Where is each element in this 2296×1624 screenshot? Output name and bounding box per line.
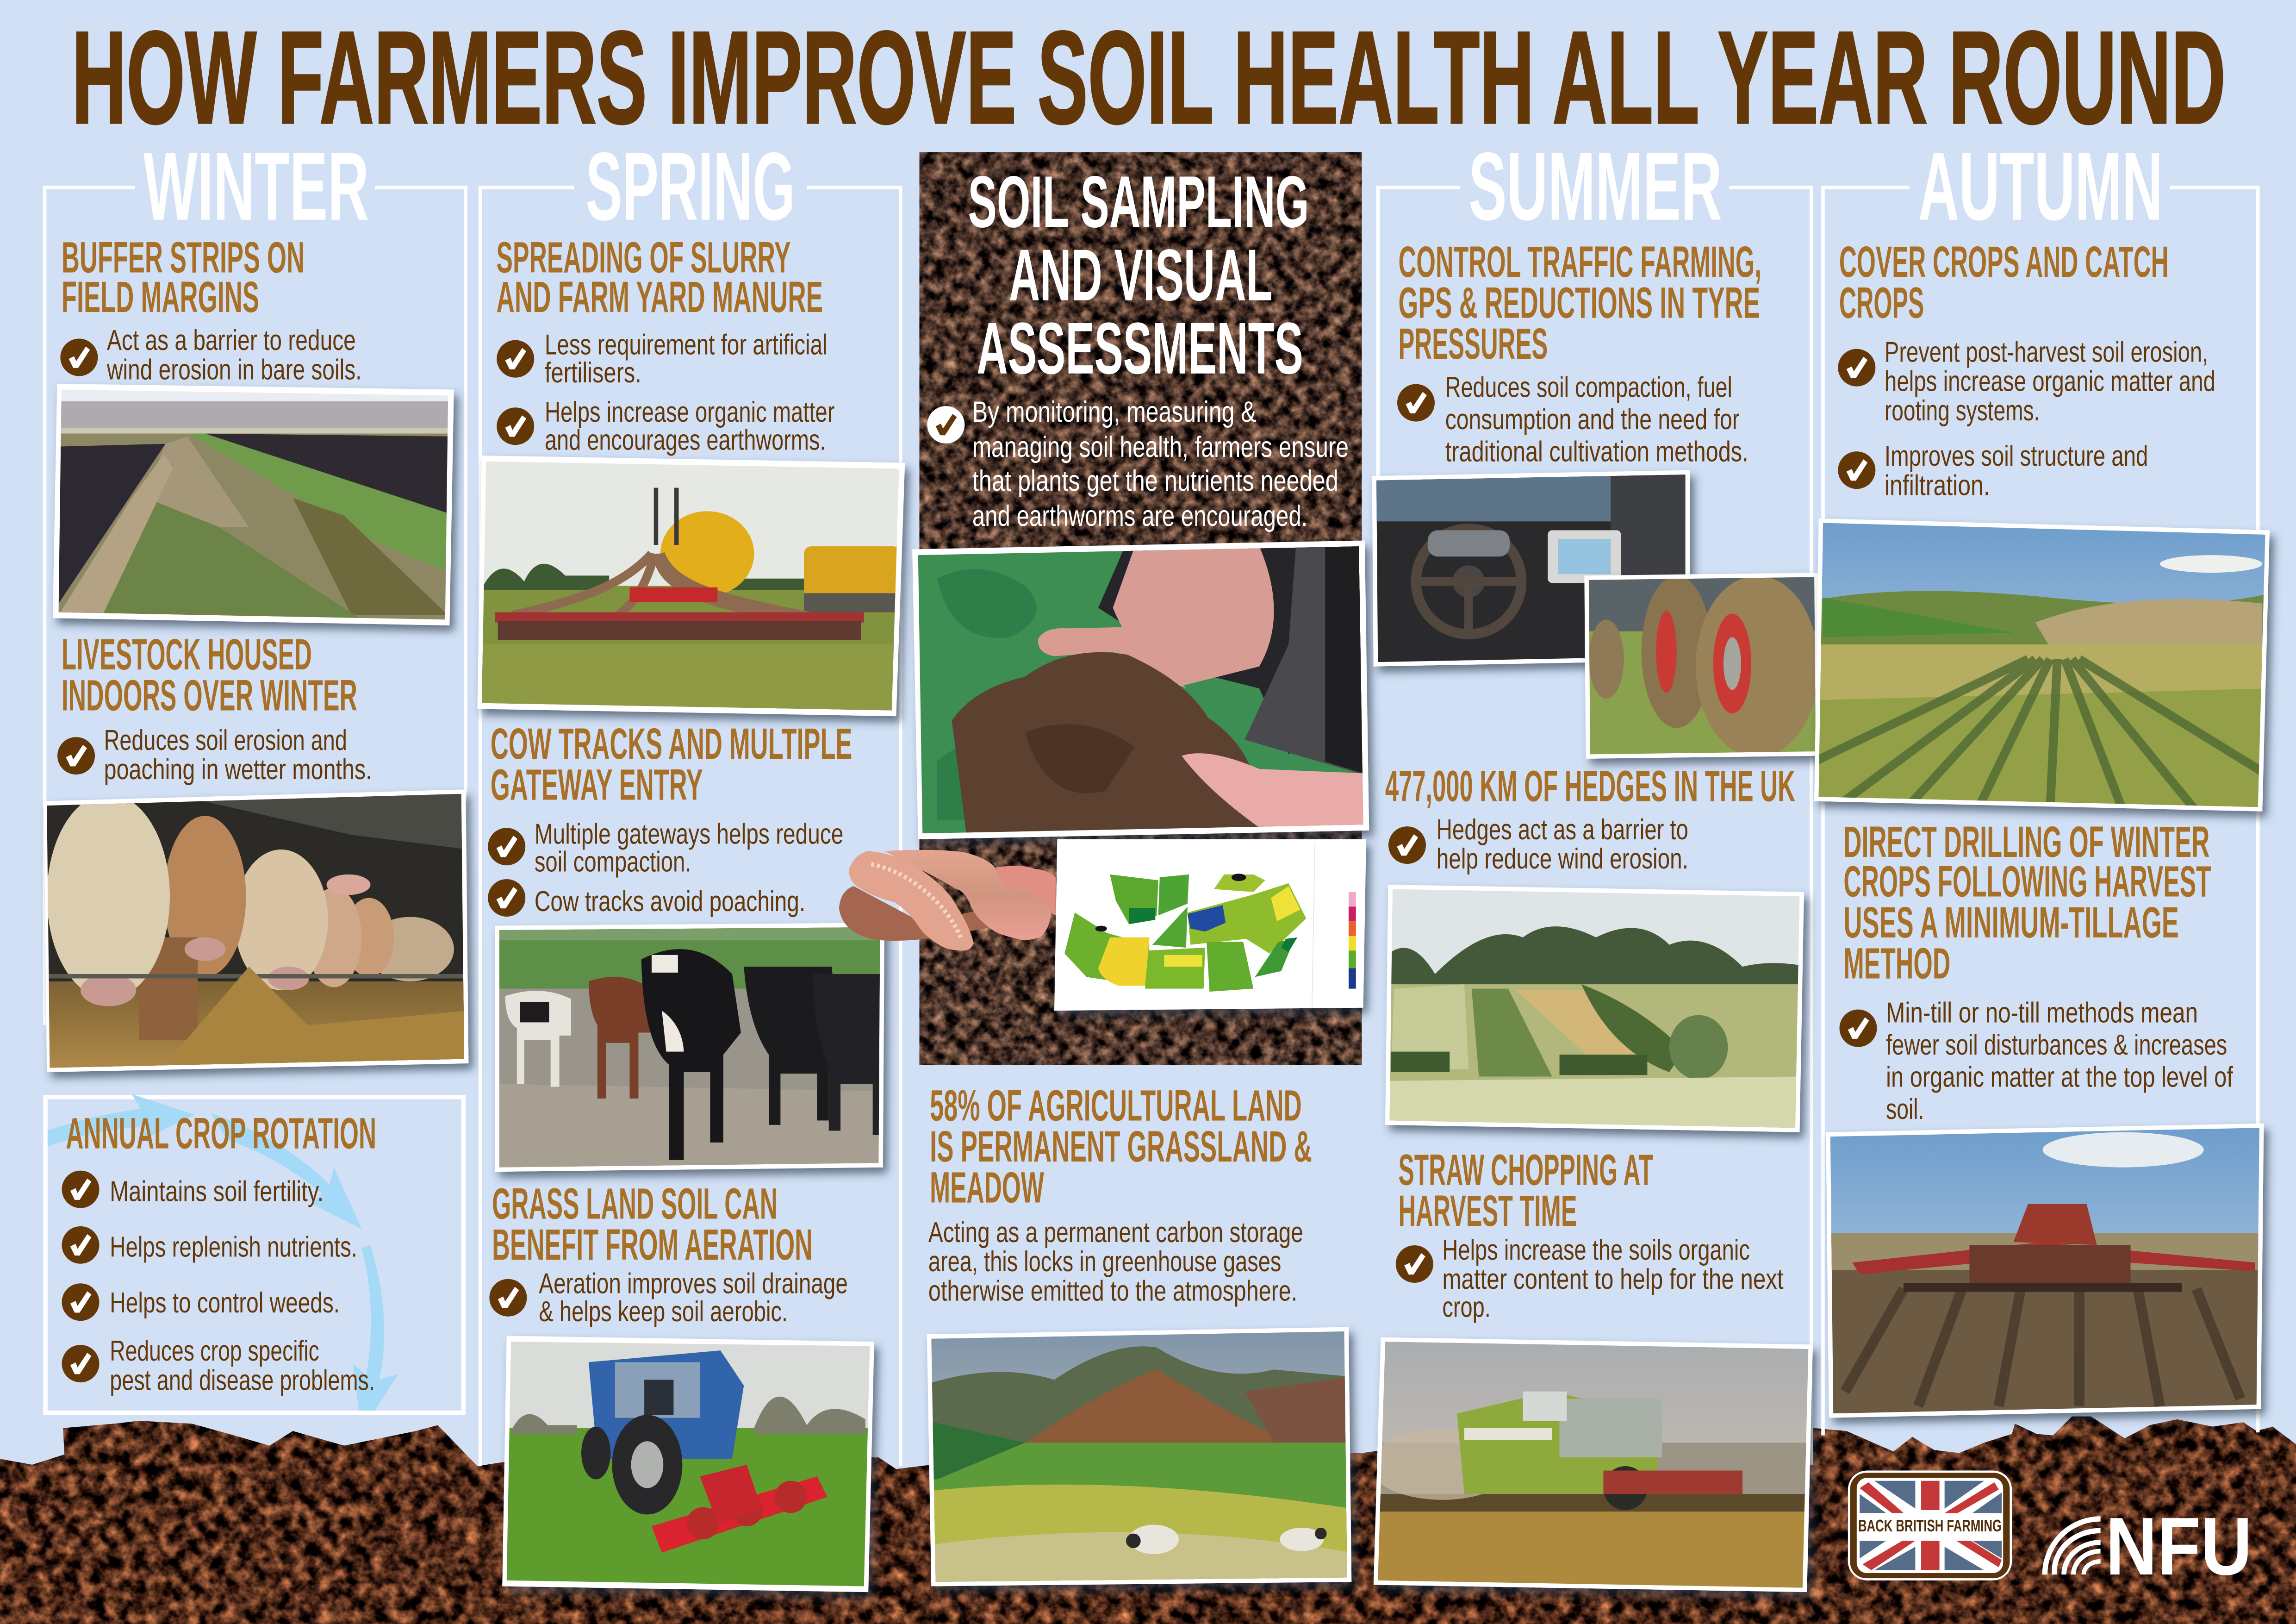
subheading: livestock: INDOORS OVER WINTER xyxy=(62,671,357,720)
photo: housed cattle xyxy=(44,789,468,1072)
subheading: straw chopping: HARVEST TIME xyxy=(1399,1187,1577,1236)
photo: slurry spreader xyxy=(477,456,905,716)
subheading: livestock xyxy=(62,630,357,720)
autumn frame xyxy=(1823,187,2258,1436)
subheading: permanent grassland: 58% OF AGRICULTURAL LAND xyxy=(930,1081,1302,1130)
badge text: BACK BRITISH FARMING xyxy=(1858,1516,2002,1535)
rotation benefit list xyxy=(110,1175,375,1397)
panel: spring xyxy=(477,133,905,1592)
photo: direct drill xyxy=(1826,1124,2264,1418)
text: cover crops xyxy=(1885,336,2215,501)
text: hedges: Hedges act as a barrier to xyxy=(1437,814,1688,846)
heading: annual crop rotation: ANNUAL CROP ROTATION xyxy=(66,1109,376,1158)
text: slurry xyxy=(545,329,834,456)
icons: checks xyxy=(488,828,525,917)
text: hedges xyxy=(1437,814,1688,875)
check icons xyxy=(62,1171,100,1382)
summer frame xyxy=(1378,187,1811,1465)
text: control traffic xyxy=(1445,371,1748,468)
rotation benefit list: Reduces crop specific xyxy=(110,1335,319,1367)
text: livestock: poaching in wetter months. xyxy=(104,754,372,786)
winter frame xyxy=(45,187,466,1025)
section: permanent grassland xyxy=(928,1081,1312,1307)
text: soil monitoring xyxy=(972,396,1349,532)
subheading: cover crops: CROPS xyxy=(1839,279,1924,328)
text: buffer strips: wind erosion in bare soils. xyxy=(106,354,361,386)
icon: white check xyxy=(927,406,964,443)
icon: check xyxy=(1839,1010,1877,1047)
text: cow tracks: Cow tracks avoid poaching. xyxy=(535,886,805,918)
heading: soil sampling: AND VISUAL xyxy=(1009,234,1272,316)
text: slurry: fertilisers. xyxy=(545,357,641,389)
text: permanent grassland: area, this locks in greenhouse gases xyxy=(928,1246,1281,1278)
section: livestock xyxy=(57,630,372,786)
text: cover crops: infiltration. xyxy=(1885,469,1990,501)
subheading: cover crops xyxy=(1839,237,2169,328)
section: cow tracks xyxy=(488,719,852,918)
subheading: permanent grassland xyxy=(930,1081,1312,1212)
spring frame xyxy=(480,187,901,1466)
text: control traffic: consumption and the need for xyxy=(1445,404,1740,436)
icon: check xyxy=(60,338,98,376)
subheading: straw chopping: STRAW CHOPPING AT xyxy=(1399,1146,1653,1195)
icon: check xyxy=(1397,384,1435,422)
icon: check xyxy=(1388,826,1426,864)
subheading: slurry: AND FARM YARD MANURE xyxy=(497,273,823,322)
icon: check xyxy=(489,1279,527,1317)
logo: NFU xyxy=(2045,1500,2252,1592)
photo: combine harvester xyxy=(1369,1337,1813,1592)
section: straw chopping xyxy=(1396,1146,1784,1323)
section: slurry xyxy=(497,233,834,456)
logo wordmark: NFU xyxy=(2106,1500,2252,1592)
subheading: control traffic xyxy=(1399,237,1761,369)
section: direct drilling xyxy=(1839,818,2234,1125)
rotation benefit list: Maintains soil fertility. xyxy=(110,1175,324,1207)
subheading: direct drilling: METHOD xyxy=(1843,939,1950,988)
soil background xyxy=(920,152,1362,1065)
text: soil monitoring: that plants get the nutrients needed xyxy=(972,465,1338,497)
subheading: cow tracks: COW TRACKS AND MULTIPLE xyxy=(491,719,852,768)
subheading: cow tracks: GATEWAY ENTRY xyxy=(491,760,703,809)
section: buffer strips xyxy=(60,233,361,386)
subheading: permanent grassland: IS PERMANENT GRASSLAND & xyxy=(930,1122,1312,1171)
text: buffer strips xyxy=(106,325,361,386)
text: cover crops: rooting systems. xyxy=(1885,395,2040,427)
subheading: straw chopping xyxy=(1399,1146,1653,1236)
photo: hedgerows xyxy=(1385,885,1808,1132)
panel: autumn xyxy=(1814,133,2270,1436)
heading: soil sampling: SOIL SAMPLING xyxy=(968,161,1309,243)
soil band along the bottom xyxy=(0,1406,2296,1624)
photo: buffer strip field xyxy=(53,384,455,625)
text: soil monitoring: managing soil health, farmers ensure xyxy=(972,431,1349,463)
subheading: hedges: 477,000 KM OF HEDGES IN THE UK xyxy=(1385,762,1795,811)
icon: check xyxy=(57,737,95,775)
text: cover crops: Prevent post-harvest soil erosion, xyxy=(1885,336,2208,368)
subheading: control traffic: PRESSURES xyxy=(1399,319,1548,369)
rotation benefit list: Helps to control weeds. xyxy=(110,1287,340,1319)
text: permanent grassland: Acting as a permanent carbon storage xyxy=(928,1217,1303,1249)
text: cover crops: Improves soil structure and xyxy=(1885,440,2148,472)
text: straw chopping: matter content to help for the next xyxy=(1442,1263,1784,1295)
subheading: aeration xyxy=(492,1179,813,1269)
text: cow tracks xyxy=(535,818,843,918)
map: field pH heat map xyxy=(1054,839,1366,1011)
subheading: buffer strips: FIELD MARGINS xyxy=(62,273,259,322)
text: control traffic: Reduces soil compaction, fuel xyxy=(1445,371,1732,403)
logo arcs xyxy=(2045,1519,2101,1574)
icons: checks xyxy=(497,340,534,445)
subheading: livestock: LIVESTOCK HOUSED xyxy=(62,630,312,679)
subheading: control traffic: GPS & REDUCTIONS IN TYRE xyxy=(1399,279,1760,328)
subheading: direct drilling xyxy=(1843,818,2211,988)
photo: dairy cows xyxy=(495,923,884,1172)
text: cow tracks: Multiple gateways helps reduce xyxy=(535,818,843,850)
flag quarters xyxy=(1860,1481,2002,1570)
icons: checks xyxy=(1838,349,1875,489)
heading: soil sampling xyxy=(968,161,1309,389)
text: straw chopping xyxy=(1442,1234,1784,1323)
text: control traffic: traditional cultivation methods. xyxy=(1445,436,1748,468)
text: slurry: Less requirement for artificial xyxy=(545,329,828,361)
heading: spring: SPRING xyxy=(586,133,795,241)
text: aeration: Aeration improves soil drainage xyxy=(539,1268,848,1300)
panel: soil sampling and visual assessments xyxy=(839,152,1369,1586)
subheading: permanent grassland: MEADOW xyxy=(930,1163,1044,1212)
section: cover crops xyxy=(1838,237,2215,501)
heading: soil sampling: ASSESSMENTS xyxy=(977,307,1303,389)
text: aeration: & helps keep soil aerobic. xyxy=(539,1296,788,1328)
text: permanent grassland xyxy=(928,1217,1303,1307)
text: slurry: Helps increase organic matter xyxy=(545,396,834,428)
text: direct drilling: soil. xyxy=(1886,1093,1924,1125)
photo: upland grassland with sheep xyxy=(927,1327,1351,1586)
text: livestock xyxy=(104,725,372,786)
rotation box xyxy=(45,1097,463,1413)
badge: back british farming xyxy=(1848,1471,2012,1580)
heading: summer: SUMMER xyxy=(1468,133,1722,241)
photo: tractor cab with GPS xyxy=(1372,470,1690,667)
subheading: buffer strips xyxy=(62,233,305,322)
illustration: earthworm xyxy=(839,850,1056,950)
photo: hands holding soil xyxy=(912,540,1369,839)
subheading: aeration: GRASS LAND SOIL CAN xyxy=(492,1179,778,1228)
panel: summer xyxy=(1369,133,1820,1592)
panel: winter xyxy=(44,133,468,1072)
text: soil monitoring: By monitoring, measuring & xyxy=(972,396,1257,428)
icon: check xyxy=(1396,1245,1433,1283)
photo: low pressure tyres xyxy=(1584,573,1820,759)
arrows: rotation cycle xyxy=(48,1094,398,1411)
subheading: cow tracks xyxy=(491,719,852,809)
text: soil monitoring: and earthworms are encouraged. xyxy=(972,500,1307,532)
text: direct drilling xyxy=(1886,997,2234,1125)
text: slurry: and encourages earthworms. xyxy=(545,424,826,456)
subheading: slurry: SPREADING OF SLURRY xyxy=(497,233,791,282)
subheading: buffer strips: BUFFER STRIPS ON xyxy=(62,233,305,282)
subheading: slurry xyxy=(497,233,823,322)
section: aeration xyxy=(489,1179,848,1328)
text: cow tracks: soil compaction. xyxy=(535,846,691,878)
text: livestock: Reduces soil erosion and xyxy=(104,725,347,756)
text: direct drilling: Min-till or no-till methods mean xyxy=(1886,997,2198,1029)
photo: cover crop field xyxy=(1814,518,2270,812)
section: control traffic xyxy=(1397,237,1761,468)
text: aeration xyxy=(539,1268,848,1328)
text: straw chopping: Helps increase the soils organic xyxy=(1442,1234,1750,1266)
heading: winter: WINTER xyxy=(143,133,369,241)
text: buffer strips: Act as a barrier to reduce xyxy=(107,325,356,356)
rotation benefit list: Helps replenish nutrients. xyxy=(110,1231,357,1263)
subheading: aeration: BENEFIT FROM AERATION xyxy=(492,1220,813,1269)
text: straw chopping: crop. xyxy=(1442,1291,1491,1323)
panel: annual crop rotation xyxy=(45,1094,463,1413)
photo: tractor and aerator xyxy=(502,1336,874,1592)
text: permanent grassland: otherwise emitted to the atmosphere. xyxy=(928,1275,1297,1307)
section: hedges xyxy=(1385,762,1795,875)
text: hedges: help reduce wind erosion. xyxy=(1437,843,1688,875)
subheading: control traffic: CONTROL TRAFFIC FARMING, xyxy=(1399,237,1761,287)
rotation benefit list: pest and disease problems. xyxy=(110,1365,375,1397)
